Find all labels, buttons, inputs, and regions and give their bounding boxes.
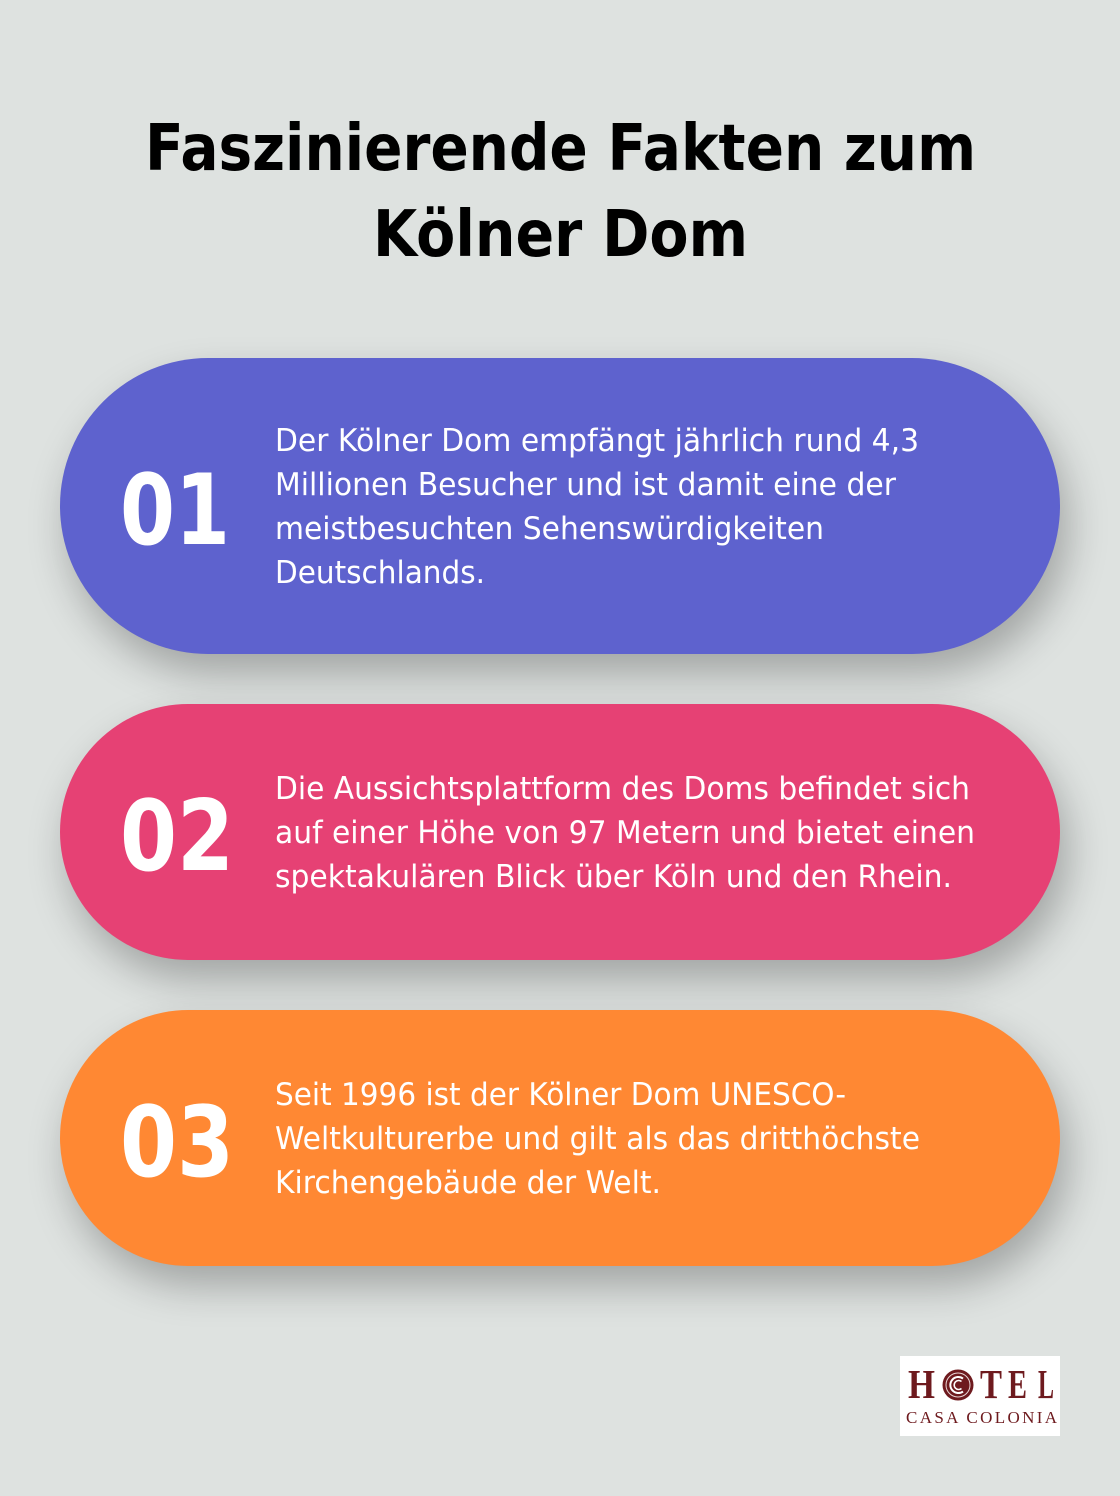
number 02: 02 [120, 780, 234, 894]
fact text 02 [275, 771, 975, 895]
fact text 02: spektakulären Blick über Köln und den Rhein. [275, 859, 952, 895]
fact text 01: Millionen Besucher und ist damit eine der [275, 467, 896, 503]
logo wordmark: CASA COLONIA [906, 1408, 1058, 1427]
fact text 01: meistbesuchten Sehenswürdigkeiten [275, 511, 824, 547]
fact text 01: Deutschlands. [275, 555, 485, 591]
fact text 01 [275, 423, 919, 591]
fact text 02: Die Aussichtsplattform des Doms befindet sich [275, 771, 970, 807]
logo: Hotel Casa Colonia [900, 1356, 1060, 1436]
fact text 01: Der Kölner Dom empfängt jährlich rund 4,3 [275, 423, 919, 459]
logo wordmark: H [908, 1361, 935, 1407]
title: Faszinierende Fakten zum [145, 112, 976, 186]
number 01: 01 [120, 454, 230, 568]
logo wordmark [906, 1361, 1058, 1427]
fact text 02: auf einer Höhe von 97 Metern und bietet einen [275, 815, 975, 851]
logo wordmark: T [980, 1361, 1002, 1407]
logo wordmark: E [1008, 1361, 1027, 1407]
panel: fact 02 [60, 704, 1060, 960]
title [145, 112, 976, 272]
title: Kölner Dom [373, 198, 748, 272]
fact text 03: Seit 1996 ist der Kölner Dom UNESCO- [275, 1077, 846, 1113]
logo wordmark: L [1038, 1361, 1054, 1407]
number 03: 03 [120, 1086, 234, 1200]
panel: fact 01 [60, 358, 1060, 654]
fact text 03: Kirchengebäude der Welt. [275, 1165, 661, 1201]
logo emblem [942, 1370, 974, 1400]
fact text 03 [275, 1077, 920, 1201]
panel: fact 03 [60, 1010, 1060, 1266]
fact text 03: Weltkulturerbe und gilt als das dritthöchste [275, 1121, 920, 1157]
